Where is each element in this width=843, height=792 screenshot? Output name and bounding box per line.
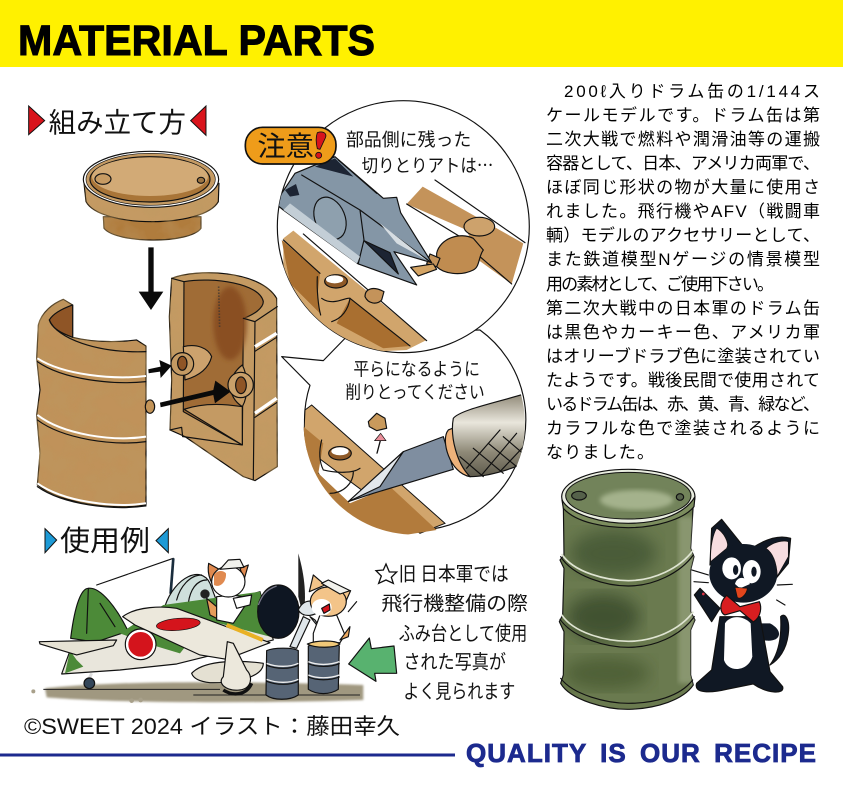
note lines: された写真が bbox=[403, 647, 506, 675]
black cat with bow tie bbox=[692, 519, 792, 692]
nippers bbox=[275, 157, 432, 285]
green drum and black cat bbox=[559, 469, 792, 709]
ground shadow bbox=[31, 682, 363, 703]
text: shave flat: 削りとってください bbox=[345, 379, 485, 405]
olive oil drum bbox=[559, 469, 695, 709]
zoom circle: cut mark bbox=[275, 101, 529, 353]
note lines: ふみ台として使用 bbox=[399, 618, 527, 646]
note lines bbox=[381, 559, 528, 704]
aeroplane bbox=[39, 553, 325, 694]
body text bbox=[546, 82, 820, 462]
body text: 容器として、日本、アメリカ両軍で、 bbox=[546, 154, 820, 173]
heading: usage: 使用例 bbox=[60, 519, 150, 560]
body text: 用の素材として、ご使用下さい。 bbox=[546, 274, 774, 294]
footer rule bbox=[0, 754, 455, 756]
arrow: green bbox=[349, 638, 397, 681]
body text: はオリーブドラブ色に塗装されてい bbox=[546, 346, 820, 366]
badge: caution: 注意 bbox=[257, 123, 314, 163]
title: MATERIAL PARTS bbox=[18, 17, 375, 65]
body text: また鉄道模型Nゲージの情景模型 bbox=[546, 250, 820, 269]
body text: いるドラム缶は、赤、黄、青、緑など、 bbox=[546, 395, 820, 414]
arrow: down bbox=[139, 247, 163, 310]
text: cut mark: 切りとりアトは… bbox=[362, 152, 493, 178]
note lines: よく見られます bbox=[403, 676, 515, 704]
body text: ほぼ同じ形状の物が大量に使用さ bbox=[546, 177, 820, 197]
body text: 輌）モデルのアクセサリーとして、 bbox=[546, 225, 820, 245]
panel: usage example bbox=[31, 519, 363, 703]
body text: カラフルな色で塗装されるように bbox=[546, 419, 820, 438]
body text: ケールモデルです。ドラム缶は第 bbox=[546, 105, 820, 125]
note lines: 飛行機整備の際 bbox=[381, 588, 528, 616]
credit line: ©SWEET 2024 イラスト：藤田幸久 bbox=[24, 714, 400, 739]
text: shave flat: 平らになるように bbox=[353, 355, 480, 381]
text: cut mark: 部品側に残った bbox=[346, 126, 471, 152]
cat mechanic: left bbox=[200, 559, 252, 623]
body text: れました。飛行機やAFV（戦闘車 bbox=[546, 202, 820, 221]
badge: caution bbox=[245, 123, 336, 164]
body text: は黒色やカーキー色、アメリカ軍 bbox=[546, 323, 820, 342]
sprue bbox=[407, 187, 523, 284]
body text: 第二次大戦中の日本軍のドラム缶 bbox=[546, 299, 820, 318]
header band bbox=[0, 0, 843, 67]
speech circle: shave flat bbox=[282, 330, 533, 540]
body text: 二次大戦で燃料や潤滑油等の運搬 bbox=[546, 130, 820, 149]
panel: caution circles bbox=[245, 101, 533, 540]
note lines: 旧 日本軍では bbox=[399, 559, 509, 587]
craft knife bbox=[348, 393, 533, 502]
text: cut mark bbox=[346, 126, 493, 178]
slogan: QUALITY IS OUR RECIPE bbox=[466, 738, 816, 768]
drum lid bbox=[83, 151, 219, 240]
arrows: fit bbox=[148, 360, 231, 407]
small arrow bbox=[375, 433, 386, 453]
panel: assembly bbox=[29, 100, 277, 508]
shaved chip bbox=[368, 413, 387, 431]
body text: たようです。戦後民間で使用されて bbox=[546, 370, 820, 390]
text: shave flat bbox=[345, 355, 485, 405]
note: star text bbox=[349, 559, 528, 704]
heading: assembly: 組み立て方 bbox=[49, 100, 186, 140]
body text: なりました。 bbox=[546, 443, 654, 462]
heading: usage bbox=[45, 519, 168, 560]
drum half: left bbox=[37, 299, 155, 508]
body text: 200ℓ入りドラム缶の1/144ス bbox=[564, 82, 820, 101]
oil drums: pair bbox=[266, 641, 340, 699]
icon: star bbox=[376, 564, 397, 583]
cat mechanic: right bbox=[309, 575, 357, 643]
drum half: right bbox=[169, 273, 277, 481]
runner below bbox=[283, 231, 427, 353]
